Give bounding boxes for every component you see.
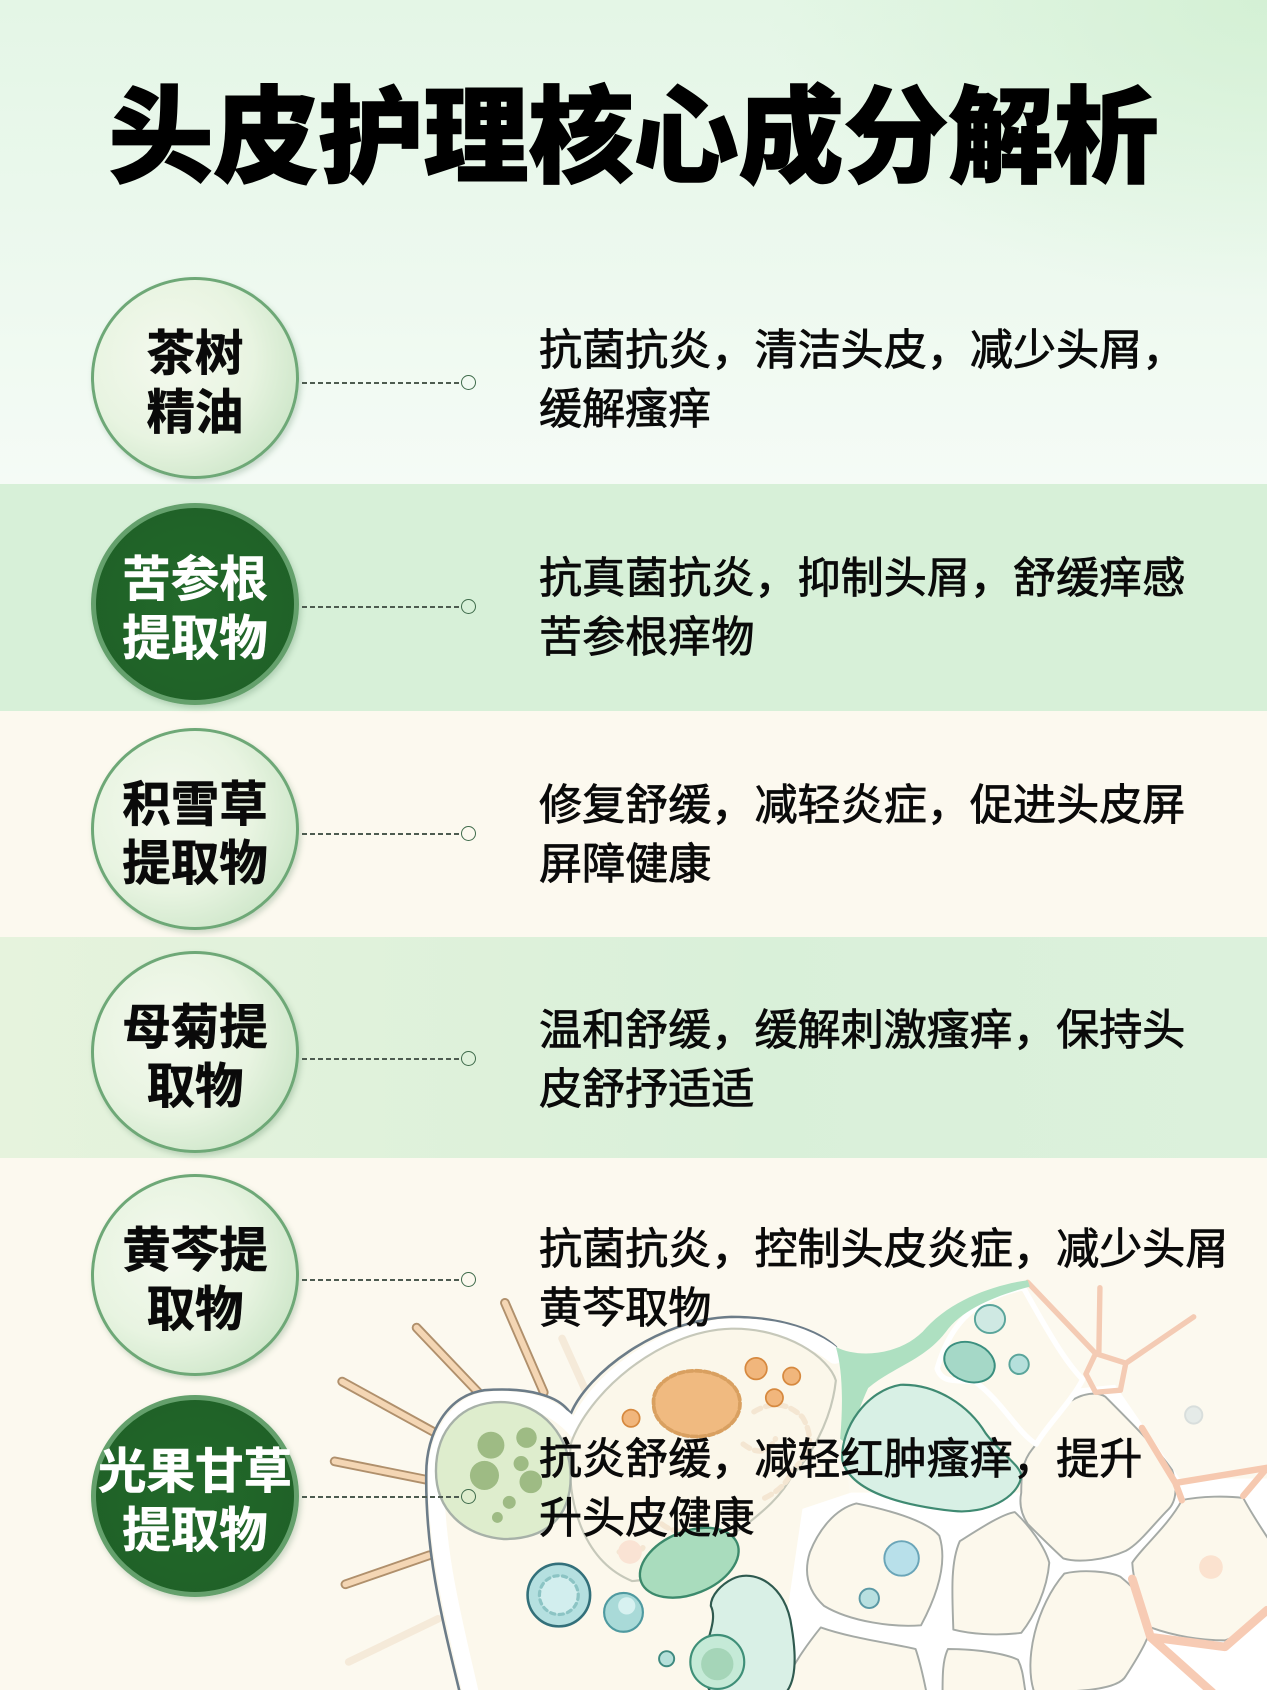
description: 屏障健康 — [539, 841, 711, 889]
rays — [335, 1303, 587, 1662]
mint cell — [842, 1385, 1021, 1511]
network white base — [775, 1385, 1267, 1690]
row: sophora root — [0, 484, 1267, 711]
ingredient badge — [91, 1395, 299, 1597]
description — [539, 1007, 1185, 1114]
ingredient badge: 取物 — [146, 1283, 244, 1337]
description: 抗菌抗炎，清洁头皮，减少头屑， — [539, 327, 1185, 375]
connector — [302, 826, 476, 841]
title: 头皮护理核心成分解析 — [108, 80, 1158, 197]
ingredient badge: 黄芩提 — [122, 1224, 268, 1278]
description: 黄芩取物 — [539, 1285, 711, 1333]
description — [539, 555, 1185, 662]
nucleus cell — [436, 1402, 571, 1539]
ingredient badge: 积雪草 — [122, 778, 268, 832]
vesicles — [860, 1305, 1223, 1608]
mint blob — [703, 1576, 795, 1690]
orange nucleus — [622, 1358, 800, 1437]
ingredient badge: 茶树 — [146, 327, 244, 381]
ingredient badge — [91, 503, 299, 705]
background wash — [0, 0, 1267, 484]
description: 抗菌抗炎，控制头皮炎症，减少头屑 — [539, 1226, 1228, 1274]
row: chamomile — [0, 937, 1267, 1158]
green ellipse — [630, 1514, 749, 1611]
ingredient badge: 提取物 — [122, 1504, 268, 1558]
description: 温和舒缓，缓解刺激瘙痒，保持头 — [539, 1007, 1185, 1055]
description: 抗炎舒缓，减轻红肿瘙痒，提升 — [539, 1436, 1142, 1484]
inner dome — [570, 1329, 836, 1581]
connector — [302, 1489, 476, 1504]
ingredient badge: 取物 — [146, 1060, 244, 1114]
description: 升头皮健康 — [539, 1495, 754, 1543]
row: centella — [90, 728, 1185, 936]
row: scutellaria — [90, 1174, 1228, 1382]
teal spheres — [528, 1564, 744, 1689]
description — [539, 1436, 1142, 1543]
connector — [302, 599, 476, 614]
description: 苦参根痒物 — [539, 614, 754, 662]
ingredient badge: 光果甘草 — [98, 1445, 292, 1499]
description: 修复舒缓，减轻炎症，促进头皮屏 — [539, 782, 1185, 830]
ingredient badge: 苦参根 — [122, 553, 268, 607]
ingredient badge — [91, 277, 299, 479]
ingredient badge — [91, 1174, 299, 1376]
description: 皮舒抒适适 — [539, 1066, 754, 1114]
ingredient badge — [91, 728, 299, 930]
description: 抗真菌抗炎，抑制头屑，舒缓痒感 — [539, 555, 1185, 603]
ingredient badge: 母菊提 — [122, 1001, 268, 1055]
illustration: scalp cells — [330, 1280, 1267, 1690]
row: tea tree oil — [90, 277, 1185, 484]
description — [539, 1226, 1228, 1333]
ingredient badge: 精油 — [146, 386, 244, 440]
description: 缓解瘙痒 — [539, 386, 711, 434]
faint organelles — [619, 1405, 809, 1555]
ingredient badge: 提取物 — [122, 837, 268, 891]
connector — [302, 375, 476, 390]
description — [539, 327, 1185, 434]
orange capillaries — [1028, 1282, 1267, 1690]
vesicle cell — [937, 1288, 1083, 1444]
connector — [302, 1051, 476, 1066]
row: licorice — [90, 1395, 1142, 1602]
green junction — [836, 1280, 1030, 1444]
ingredient badge — [91, 951, 299, 1153]
outer cell dome — [426, 1317, 851, 1690]
tissue cells — [781, 1394, 1267, 1690]
description — [539, 782, 1185, 889]
ingredient badge: 提取物 — [122, 612, 268, 666]
connector — [302, 1272, 476, 1287]
